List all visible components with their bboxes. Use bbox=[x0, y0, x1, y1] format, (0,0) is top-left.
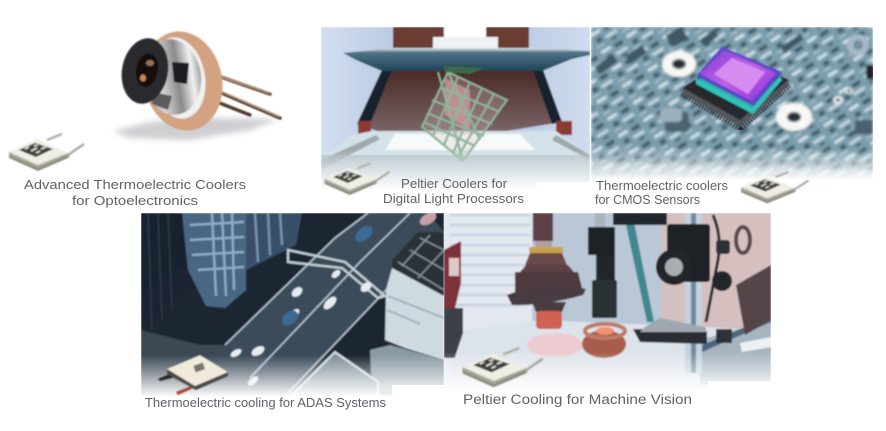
caption: digital light processors: Peltier Coolers for bbox=[401, 177, 507, 191]
caption: ADAS systems: Thermoelectric cooling for ADAS Systems bbox=[145, 396, 386, 410]
caption: optoelectronics: for Optoelectronics bbox=[72, 193, 199, 208]
caption: digital light processors bbox=[383, 177, 524, 206]
icon: thermoelectric cooler bbox=[325, 163, 389, 195]
panel: digital light processors bbox=[321, 27, 590, 186]
caption: optoelectronics bbox=[24, 177, 247, 208]
fade bbox=[591, 148, 873, 180]
caption: machine vision: Peltier Cooling for Machine Vision bbox=[463, 392, 692, 407]
panel: ADAS systems bbox=[141, 210, 444, 411]
icon: thermoelectric cooler bbox=[463, 348, 543, 387]
fade bbox=[321, 150, 590, 190]
fade bbox=[444, 352, 771, 392]
icon: thermoelectric module with leads bbox=[158, 355, 228, 395]
scene: inspection rig bbox=[444, 213, 771, 386]
caption: digital light processors: Digital Light Processors bbox=[383, 192, 524, 206]
icon: thermoelectric cooler bbox=[9, 134, 84, 171]
caption: CMOS sensors bbox=[595, 179, 728, 207]
fade bbox=[141, 355, 444, 397]
panel: CMOS sensors bbox=[591, 27, 873, 178]
scene: 3D printer bbox=[321, 27, 590, 186]
icon: laser diode package bbox=[113, 24, 280, 140]
scene: city road bbox=[141, 210, 444, 410]
panel: machine vision bbox=[444, 213, 771, 386]
caption: CMOS sensors: Thermoelectric coolers bbox=[596, 179, 728, 193]
icon: thermoelectric cooler bbox=[741, 172, 809, 203]
panel: optoelectronics bbox=[9, 24, 280, 208]
caption: optoelectronics: Advanced Thermoelectric Coolers bbox=[24, 177, 247, 192]
caption: CMOS sensors: for CMOS Sensors bbox=[595, 193, 700, 207]
scene: circuit board bbox=[591, 27, 873, 178]
icon: CMOS sensor chip bbox=[683, 47, 788, 126]
icon: lattice cube bbox=[422, 66, 507, 161]
